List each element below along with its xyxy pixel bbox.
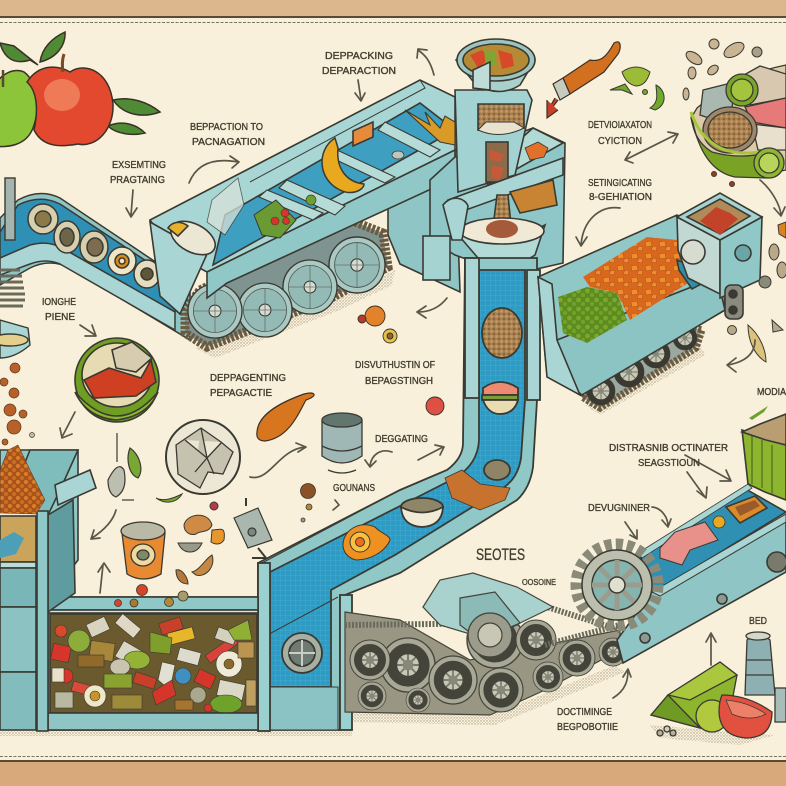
metal housing <box>423 573 553 640</box>
right rising conveyor <box>617 406 786 663</box>
icon: food tray <box>726 496 767 523</box>
icon: grey leaf sprig <box>108 433 141 500</box>
end wall behind wheels <box>388 150 460 292</box>
bottom right still life <box>651 632 786 738</box>
trash items <box>51 614 256 713</box>
label: distribution section: DISTRASNIB OCTINATER <box>609 443 728 454</box>
label: distribution: DISVUTHUSTIN OF <box>355 360 435 371</box>
hopper bowl <box>456 45 535 92</box>
icon: steel cup <box>322 413 362 473</box>
label: distribution section: SEAGSTIOUN <box>638 458 700 469</box>
orange pile <box>583 237 688 320</box>
right machine box <box>677 193 762 319</box>
label: depackaging: DEPPAGENTING <box>210 373 286 384</box>
right edge bits <box>728 222 786 362</box>
tower with hopper <box>423 39 565 280</box>
label: setting: 8-GEHIATION <box>589 192 652 203</box>
bottom trash bin <box>48 584 258 730</box>
icon: fan <box>282 633 322 673</box>
icon: orange snail <box>343 525 390 560</box>
small items on bin lip <box>114 584 188 607</box>
label: depacking: DEPPACKING <box>325 51 393 62</box>
icon: lime and green bits <box>610 67 664 110</box>
icon: green bowl <box>75 338 159 422</box>
scattered snacks <box>156 494 224 584</box>
top right salad bowl <box>691 65 786 178</box>
label: preparation to packaging: PACNAGATION <box>192 137 265 148</box>
label: bottom: BEGPOBOTIIE <box>557 722 618 733</box>
label: devugniner: DEVUGNINER <box>588 503 650 514</box>
label: oosoine: OOSOINE <box>522 578 556 587</box>
icon: orange tool <box>547 42 620 118</box>
label: depackaging <box>210 373 286 399</box>
icon: green crate <box>742 406 786 500</box>
label: distribution: BEPAGSTINGH <box>365 376 433 387</box>
icon: grain disc <box>482 308 522 358</box>
label: distribution <box>355 360 435 387</box>
conveyor discs <box>28 204 160 288</box>
label: preparation to packaging <box>190 122 265 148</box>
mechanical drive section <box>345 573 627 715</box>
left conveyor <box>0 193 190 340</box>
label: existing packaging <box>110 160 166 186</box>
label: goumans: GOUNANS <box>333 483 375 494</box>
label: seotes: SEOTES <box>476 545 525 564</box>
label: setting: SETINGICATING <box>588 178 652 189</box>
icon: silver jug <box>234 498 272 558</box>
icon: banana <box>322 138 364 192</box>
icon: orange can <box>121 522 165 579</box>
tracked conveyor box <box>150 80 460 347</box>
bottom kraft border <box>0 756 786 786</box>
food on belt <box>254 200 296 238</box>
green pile <box>558 287 627 343</box>
left pole and coil <box>0 178 30 358</box>
belt <box>213 103 455 265</box>
track and wheels <box>185 220 388 347</box>
top kraft border <box>0 0 786 22</box>
icon: orange sign <box>353 122 373 146</box>
icon: tomato and dots <box>358 306 444 415</box>
lower bowl <box>454 225 545 266</box>
label: bottom: DOCTIMINGE <box>557 707 612 718</box>
large gear <box>577 545 657 625</box>
truck conveyor <box>538 193 762 408</box>
icon: orange ladle <box>257 393 314 441</box>
orange pile <box>0 445 45 514</box>
label: degrating: DEGGATING <box>375 434 428 445</box>
icon: white bowl <box>401 498 443 527</box>
label: depacking: DEPARACTION <box>322 66 396 77</box>
label: iodine piene <box>42 297 76 323</box>
label: iodine piene: PIENE <box>45 312 75 323</box>
label: detoxication <box>588 120 652 147</box>
label: detoxication: CYICTION <box>598 136 642 147</box>
mid ledge <box>448 158 563 215</box>
label: bed: BED <box>749 616 767 627</box>
label: depackaging: PEPAGACTIE <box>210 388 272 399</box>
long blue conveyor <box>258 258 540 731</box>
icon: sandwich <box>482 382 518 414</box>
fries <box>405 110 455 145</box>
icon: oval disc <box>484 460 510 480</box>
arrows <box>60 49 785 698</box>
falling pellets <box>0 363 34 445</box>
label: distribution section <box>609 443 728 469</box>
label: existing packaging: PRAGTAING <box>110 175 165 186</box>
label: iodine piene: IONGHE <box>42 297 76 308</box>
icon: meat <box>660 522 718 565</box>
ground shadows <box>0 270 775 745</box>
label: depacking <box>322 51 396 77</box>
scattered bits near salad <box>683 39 762 186</box>
food pile <box>445 470 510 510</box>
label: preparation to packaging: BEPPACTION TO <box>190 122 263 133</box>
icon: apples <box>0 32 160 147</box>
food crumbs <box>300 484 316 522</box>
label: setting <box>588 178 652 203</box>
label: bottom <box>557 707 618 733</box>
left hopper and panels <box>0 445 96 731</box>
label: detoxication: DETVIOIAXATON <box>588 120 652 131</box>
icon: wire sphere <box>166 420 240 494</box>
label: existing packaging: EXSEMTING <box>112 160 166 171</box>
